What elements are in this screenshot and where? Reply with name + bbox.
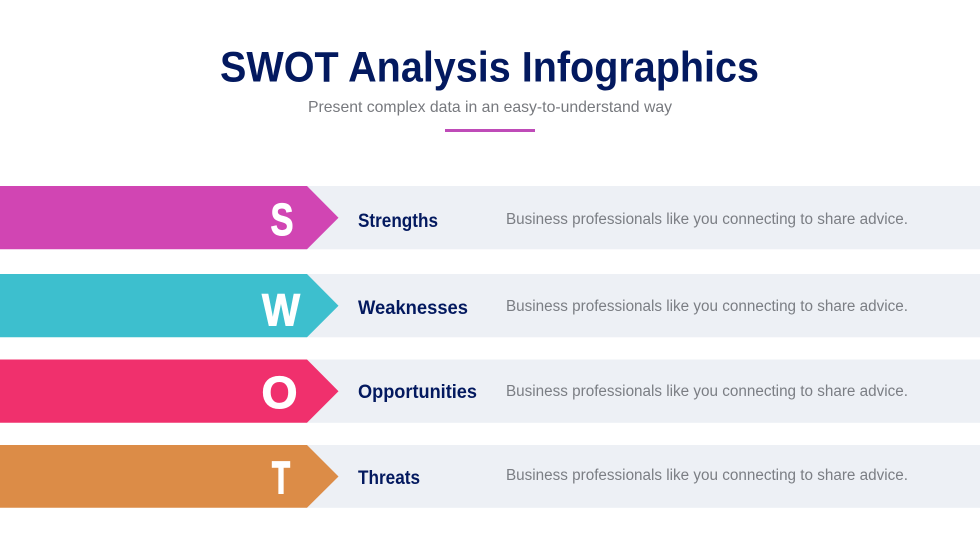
letter T: T <box>272 452 290 504</box>
row: opportunities <box>0 360 980 423</box>
letter W: W <box>262 284 300 336</box>
letter S: S <box>270 194 294 245</box>
arrow: O <box>0 360 338 423</box>
row: weaknesses <box>0 274 980 337</box>
row background <box>300 274 980 337</box>
row background <box>300 360 980 423</box>
description: Business professionals like you connecting to share advice. <box>506 298 908 315</box>
heading: Opportunities: Opportunities <box>358 382 477 403</box>
heading: Weaknesses: Weaknesses <box>358 298 468 319</box>
header <box>220 44 759 132</box>
arrow: W <box>0 274 338 337</box>
title: SWOT Analysis Infographics <box>220 44 759 92</box>
letter O: O <box>262 367 298 418</box>
row: strengths <box>0 186 980 249</box>
row background <box>300 445 980 508</box>
accent underline <box>445 129 535 132</box>
arrow: S <box>0 186 338 249</box>
arrow: T <box>0 445 338 508</box>
description: Business professionals like you connecting to share advice. <box>506 383 908 400</box>
heading: Strengths: Strengths <box>358 211 438 232</box>
subtitle: Present complex data in an easy-to-understand way <box>308 99 672 116</box>
row background <box>300 186 980 249</box>
heading: Threats: Threats <box>358 468 420 489</box>
row: threats <box>0 445 980 508</box>
description: Business professionals like you connecting to share advice. <box>506 467 908 484</box>
description: Business professionals like you connecting to share advice. <box>506 211 908 228</box>
